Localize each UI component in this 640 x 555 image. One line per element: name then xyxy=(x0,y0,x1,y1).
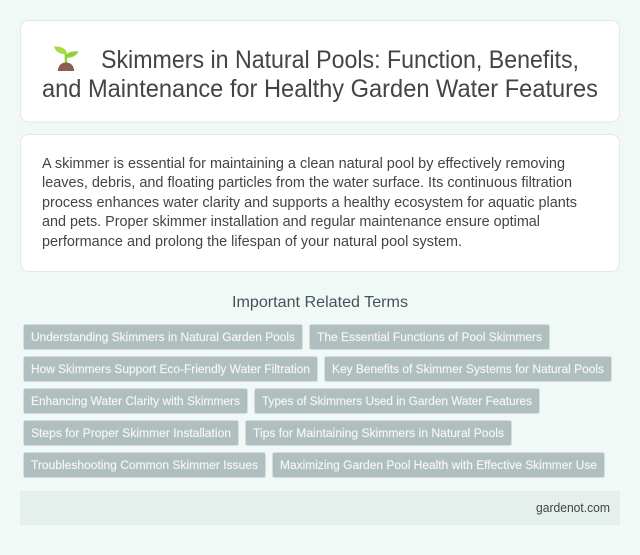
panel: description xyxy=(20,134,620,272)
tag: Key Benefits of Skimmer Systems for Natural Pools xyxy=(332,362,604,376)
tag xyxy=(254,388,540,414)
tag: Tips for Maintaining Skimmers in Natural Pools xyxy=(253,426,504,440)
heading: and Maintenance for Healthy Garden Water Features xyxy=(42,75,598,103)
footer: gardenot.com xyxy=(536,501,610,515)
text block: description: and pets. Proper skimmer installation and regular maintenance ensure optimal xyxy=(42,214,540,230)
icon: seedling xyxy=(54,46,78,71)
tag xyxy=(24,324,302,350)
tag: How Skimmers Support Eco-Friendly Water Filtration xyxy=(31,362,310,376)
tag: Steps for Proper Skimmer Installation xyxy=(31,426,231,440)
heading: related terms: Important Related Terms xyxy=(232,294,408,311)
text block: description: process enhances water clarity and supports a healthy ecosystem for aquatic plants xyxy=(42,195,577,211)
text block: description: performance and prolong the lifespan of your natural pool system. xyxy=(42,234,462,250)
tag: Understanding Skimmers in Natural Garden Pools xyxy=(31,330,295,344)
tag xyxy=(246,420,512,446)
tag: Enhancing Water Clarity with Skimmers xyxy=(31,394,240,408)
heading: Skimmers in Natural Pools: Function, Benefits, xyxy=(101,46,579,74)
tag: The Essential Functions of Pool Skimmers xyxy=(317,330,542,344)
footer xyxy=(20,491,620,525)
panel: title xyxy=(20,20,620,122)
tag: Types of Skimmers Used in Garden Water Features xyxy=(262,394,532,408)
text block: description: A skimmer is essential for maintaining a clean natural pool by effectively removing xyxy=(42,156,565,172)
tag xyxy=(24,388,248,414)
tag xyxy=(24,452,266,478)
tag xyxy=(310,324,550,350)
tag: Maximizing Garden Pool Health with Effective Skimmer Use xyxy=(280,458,597,472)
tag: Troubleshooting Common Skimmer Issues xyxy=(31,458,258,472)
tag xyxy=(24,356,318,382)
tag list xyxy=(24,324,612,478)
tag xyxy=(24,420,238,446)
tag xyxy=(324,356,612,382)
heading xyxy=(42,46,598,103)
text block: description: leaves, debris, and floating particles from the water surface. Its continuous filtration xyxy=(42,175,572,191)
tag xyxy=(272,452,604,478)
text block: description xyxy=(42,156,577,250)
